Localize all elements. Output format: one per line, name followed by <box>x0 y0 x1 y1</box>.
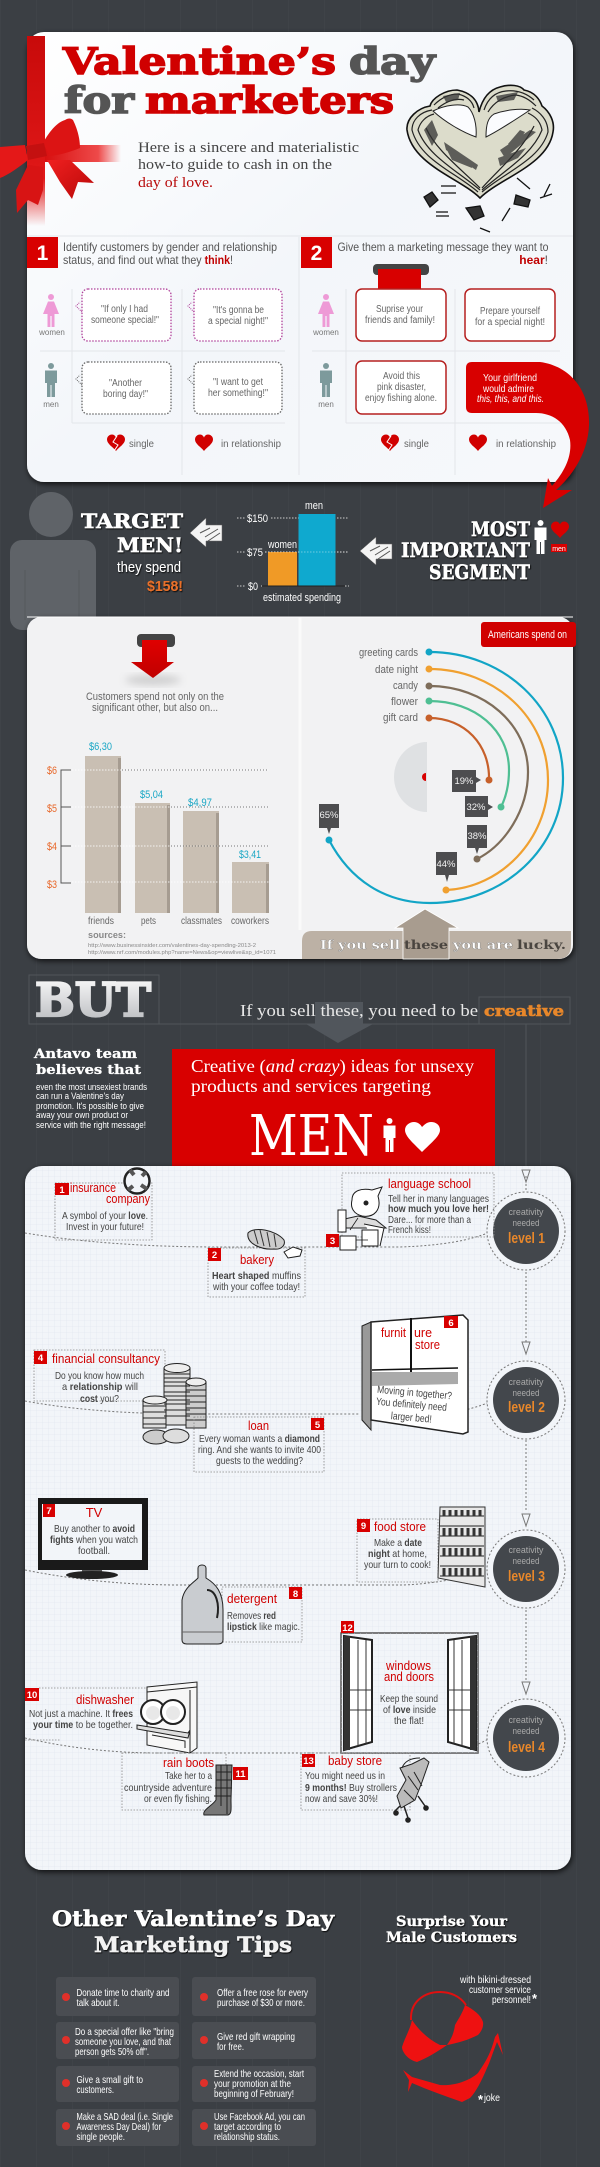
most important segment text <box>401 517 530 584</box>
item 6: furniture store: furnit <box>381 1325 406 1340</box>
item 4: financial consultancy: a relationship will <box>62 1381 138 1393</box>
intro text: Here is a sincere and materialistic <box>138 140 359 156</box>
item 12: windows and doors: Keep the sound <box>380 1693 438 1705</box>
panel: spending breakdown <box>27 617 576 959</box>
item 5: loan: ring. And she wants to invite 400 <box>198 1444 321 1456</box>
bikini caption: personnel! <box>492 1995 531 2006</box>
arc labels: date night <box>375 664 418 676</box>
icon: bread <box>248 1229 302 1258</box>
item 3: language school: language school <box>388 1176 471 1191</box>
step 2 heading: hear! <box>519 253 548 267</box>
step 1 heading: 1 <box>37 242 49 265</box>
red arrow down <box>125 634 181 685</box>
item 6: furniture store: store <box>415 1337 440 1352</box>
sources: sources: <box>88 930 126 940</box>
gender icons, step 1 <box>38 294 65 409</box>
level 3 badge <box>487 1530 565 1608</box>
level 4 badge: level 4 <box>508 1739 546 1756</box>
spending bar chart <box>47 741 269 927</box>
legend, step 1 <box>107 434 281 451</box>
curved red arrow with message: would admire <box>482 383 534 395</box>
item 3: language school <box>326 1173 494 1250</box>
step 1 heading <box>27 237 277 268</box>
antavo note: believes that <box>36 1063 141 1078</box>
icon: life ring <box>124 1168 150 1194</box>
item 6: furniture store: ure <box>414 1325 432 1340</box>
men heart icon <box>534 520 569 554</box>
item 10: dishwasher: your time to be together. <box>33 1719 133 1731</box>
item 1: insurance company <box>55 1168 152 1240</box>
sources: http://www.businessinsider.com/valentines-day-spending-2013-2 <box>88 943 256 949</box>
step 2 heading <box>301 237 549 268</box>
lucky strip and up arrow: lucky. <box>517 938 566 952</box>
arrow heads <box>522 1170 530 1694</box>
target men text: TARGET <box>81 509 183 533</box>
if you sell these text: If you sell these, you need to be <box>240 1001 478 1020</box>
item 12: windows and doors: the flat! <box>394 1715 424 1727</box>
percent tags: 65% <box>319 810 339 821</box>
item 11: rain boots: Take her to a <box>165 1770 212 1782</box>
most important segment text: IMPORTANT <box>401 538 530 562</box>
tips: right column: for free. <box>217 2041 244 2053</box>
antavo note <box>33 1047 147 1130</box>
item 12: windows and doors: 12 <box>342 1623 353 1634</box>
item 1: insurance company: company <box>106 1191 150 1206</box>
tips: left column: Make a SAD deal (i.e. Single <box>76 2111 173 2123</box>
speech bubbles, step 1: "I want to get <box>213 377 263 388</box>
lucky strip and up arrow: If you sell <box>320 938 401 952</box>
level 3 badge: creativity <box>508 1545 544 1556</box>
item 6: furniture store: 6 <box>448 1318 454 1329</box>
item 12: windows and doors: windows <box>385 1658 431 1673</box>
surprise heading: Male Customers <box>386 1930 517 1946</box>
spending bar chart: $4 <box>47 841 57 853</box>
spending note: Customers spend not only on the <box>86 691 224 703</box>
level 1 badge: creativity <box>508 1207 544 1218</box>
item 6: furniture store: You definitely need <box>376 1396 448 1414</box>
tips: right column: target according to <box>214 2121 281 2133</box>
curved red arrow with message <box>466 362 589 508</box>
sources: http://www.nrf.com/modules.php?name=News&op=viewlive&sp_id=1071 <box>88 950 276 956</box>
red banner: Creative (and crazy) ideas for unsexy <box>191 1056 474 1077</box>
americans spend on tag: Americans spend on <box>488 629 567 641</box>
item 13: baby store: 13 <box>303 1756 314 1767</box>
lucky strip and up arrow: you are <box>452 938 513 952</box>
bikini caption: with bikini-dressed <box>459 1975 531 1986</box>
item 13: baby store: 9 months! Buy strollers <box>305 1782 397 1794</box>
tips: left column: single people. <box>76 2131 125 2143</box>
item 10: dishwasher: 10 <box>27 1690 37 1701</box>
item 7: TV: fights when you watch <box>50 1534 138 1546</box>
surprise heading: Surprise Your <box>396 1914 508 1930</box>
spending bar chart: $0 <box>248 581 258 593</box>
item 10: dishwasher: dishwasher <box>76 1692 135 1707</box>
spending bar chart: $3,41 <box>239 849 261 861</box>
spending bar chart: $3 <box>47 879 57 891</box>
icon: stroller <box>393 1758 429 1823</box>
step 2 heading: 2 <box>311 242 322 265</box>
item 4: financial consultancy <box>34 1350 206 1444</box>
item 9: food store: your turn to cook! <box>364 1559 431 1571</box>
item 8: detergent: Removes red <box>227 1610 276 1622</box>
spending bar chart: $4,97 <box>188 797 212 809</box>
other tips heading: Other Valentine’s Day <box>52 1906 335 1931</box>
item 11: rain boots: 11 <box>235 1769 246 1780</box>
item 1: insurance company: 1 <box>59 1185 65 1196</box>
gender icons, step 1: women <box>38 328 65 337</box>
item 4: financial consultancy: financial consultancy <box>52 1351 160 1366</box>
item 11: rain boots: rain boots <box>163 1755 214 1770</box>
item 3: language school: 3 <box>330 1236 335 1247</box>
tips: left column: Awareness Day Deal) for <box>76 2121 161 2133</box>
title: day <box>349 41 436 83</box>
item 8: detergent <box>182 1565 302 1644</box>
legend, step 1: in relationship <box>221 438 281 450</box>
spending bar chart: coworkers <box>231 916 269 927</box>
speech bubbles, step 1: "It's gonna be <box>213 305 264 316</box>
speech bubbles, step 1: "If only I had <box>101 304 148 315</box>
money heart illustration <box>407 85 553 232</box>
item 7: TV: Buy another to avoid <box>54 1523 135 1535</box>
speech bubbles, step 1: her something!" <box>208 388 268 399</box>
icon: store shelf <box>438 1507 485 1587</box>
item 6: furniture store: larger bed! <box>390 1410 432 1426</box>
level 2 badge: needed <box>512 1388 540 1399</box>
target men text: $158! <box>147 578 183 595</box>
if you sell these text: creative <box>484 1002 564 1020</box>
level 4 badge: needed <box>512 1726 540 1737</box>
level 2 badge: level 2 <box>508 1399 545 1416</box>
arc labels: flower <box>391 696 418 708</box>
spending bar chart: friends <box>88 916 114 927</box>
icon: bikini <box>402 1992 503 2102</box>
legend, step 1: single <box>129 438 154 450</box>
arrow: from segment to chart <box>360 537 392 565</box>
item 9: food store: Make a date <box>374 1537 422 1549</box>
tips: right column: Give red gift wrapping <box>217 2031 295 2043</box>
spending bar chart: estimated spending <box>263 592 341 604</box>
item 7: TV: 7 <box>46 1506 52 1517</box>
item 7: TV: football. <box>78 1545 110 1557</box>
item 13: baby store: You might need us in <box>305 1770 385 1782</box>
other tips heading <box>52 1906 335 1957</box>
percent tags: 44% <box>436 859 456 870</box>
message boxes, step 2: Prepare yourself <box>480 306 540 317</box>
other tips heading: Marketing Tips <box>94 1932 292 1957</box>
message boxes, step 2: enjoy fishing alone. <box>365 393 437 404</box>
step 2 heading: Give them a marketing message they want to <box>338 240 549 254</box>
but heading: BUT <box>35 973 151 1027</box>
spending bar chart: women <box>267 539 297 551</box>
item 11: rain boots <box>122 1753 248 1815</box>
gift ribbon and bow <box>0 36 121 226</box>
item 8: detergent: lipstick like magic. <box>227 1621 300 1633</box>
panel: creative ideas <box>25 1166 571 1870</box>
spending bar chart: $150 <box>247 513 268 525</box>
bikini caption: * <box>532 1991 538 2006</box>
item 2: bakery: 2 <box>212 1250 217 1261</box>
spending bar chart: $6,30 <box>89 741 112 753</box>
item 6: furniture store <box>362 1315 468 1434</box>
antavo note: away your own product or <box>36 1110 128 1120</box>
lucky strip and up arrow: these <box>404 938 448 952</box>
antavo note: can run a Valentine's day <box>36 1091 124 1101</box>
message boxes, step 2: friends and family! <box>365 315 435 326</box>
item 13: baby store <box>301 1753 429 1823</box>
item 3: language school: how much you love her! <box>388 1203 489 1215</box>
legend, step 2 <box>381 434 556 451</box>
arc chart <box>326 648 563 903</box>
speech bubbles, step 1: boring day!" <box>103 389 148 400</box>
spending bar chart: men <box>305 500 323 512</box>
percent tags: 19% <box>454 776 474 787</box>
level 4 badge: creativity <box>508 1715 544 1726</box>
level 1 badge: needed <box>512 1218 540 1229</box>
tips: right column: beginning of February! <box>214 2088 294 2100</box>
level 3 badge: needed <box>512 1556 540 1567</box>
red banner: products and services targeting <box>191 1076 431 1096</box>
surprise heading <box>386 1914 517 1946</box>
item 3: language school: Tell her in many languages <box>388 1193 489 1205</box>
item 8: detergent: detergent <box>227 1591 277 1606</box>
if you sell these text <box>240 1001 564 1020</box>
title: Valentine’s <box>62 41 336 83</box>
icon: rain boot <box>204 1765 232 1815</box>
spending bar chart: classmates <box>181 916 222 927</box>
target men text: they spend <box>117 559 181 576</box>
item 13: baby store: baby store <box>328 1753 382 1768</box>
spending note <box>86 691 224 714</box>
bikini caption: joke <box>483 2093 500 2104</box>
tips: left column: Donate time to charity and <box>76 1987 170 1999</box>
antavo note: service with the right message! <box>36 1120 146 1130</box>
spending bar chart <box>237 500 349 604</box>
central half disc <box>394 742 427 812</box>
red banner: MEN <box>249 1104 374 1169</box>
percent tags: 32% <box>466 802 486 813</box>
level 3 badge: level 3 <box>508 1568 545 1585</box>
step 1 heading: status, and find out what they think! <box>63 253 233 267</box>
target men text: MEN! <box>117 533 183 557</box>
tips: right column: Offer a free rose for every <box>217 1987 309 1999</box>
speech bubbles, step 1 <box>76 289 282 414</box>
step 1 heading: Identify customers by gender and relationship <box>63 240 277 254</box>
message boxes, step 2: for a special night! <box>475 317 545 328</box>
message boxes, step 2: pink disaster, <box>377 382 426 393</box>
item 5: loan: guests to the wedding? <box>216 1455 303 1467</box>
speech bubbles, step 1: "Another <box>109 378 143 389</box>
legend, step 2: in relationship <box>496 438 556 450</box>
title <box>62 41 436 122</box>
tips: left column: customers. <box>76 2084 114 2096</box>
item 9: food store: food store <box>374 1519 426 1534</box>
if you sell these arrow <box>306 1002 373 1043</box>
item 1: insurance company: A symbol of your love. <box>62 1210 148 1222</box>
item 12: windows and doors <box>341 1621 478 1753</box>
but heading outlines <box>29 975 570 1170</box>
tips: right column: Extend the occasion, start <box>214 2068 304 2080</box>
item 2: bakery <box>208 1229 305 1297</box>
tips: left column <box>56 1977 179 2146</box>
arrow: pointing to target men <box>190 518 222 547</box>
panel: identify customers and marketing messages <box>0 32 573 482</box>
arc labels: gift card <box>383 712 418 724</box>
dividers <box>27 236 573 475</box>
arc labels: candy <box>393 680 418 692</box>
tips: right column: relationship status. <box>214 2131 280 2143</box>
level connector lines <box>25 1176 526 1753</box>
icon: dishwasher <box>137 1682 197 1753</box>
item 13: baby store: now and save 30%! <box>305 1793 378 1805</box>
level 1 badge <box>487 1192 565 1270</box>
spending bar chart: $5 <box>47 803 57 815</box>
item 4: financial consultancy: 4 <box>38 1353 44 1364</box>
tips: right column: purchase of $30 or more. <box>217 1997 305 2009</box>
tips: right column <box>192 1977 316 2146</box>
icon: student at desk <box>338 1187 386 1250</box>
intro text: how-to guide to cash in on the <box>138 157 332 173</box>
item 12: windows and doors: and doors <box>384 1669 434 1684</box>
tips: left column: person gets 50% off". <box>75 2046 149 2058</box>
sources <box>88 930 276 956</box>
arc labels: greeting cards <box>359 647 418 659</box>
intro text: day of love. <box>138 175 213 191</box>
antavo note: Antavo team <box>33 1047 137 1062</box>
speech bubbles, step 1: a special night!" <box>208 316 268 327</box>
most important segment text: MOST <box>471 517 530 541</box>
silhouette of a man <box>10 492 96 630</box>
item 12: windows and doors: of love inside <box>383 1704 436 1716</box>
item 11: rain boots: or even fly fishing. <box>144 1793 212 1805</box>
level 2 badge <box>487 1361 565 1439</box>
item 7: TV: TV <box>86 1505 103 1520</box>
item 10: dishwasher <box>25 1682 197 1753</box>
item 7: TV <box>38 1498 148 1579</box>
spending bar chart: $6 <box>47 765 57 777</box>
icon: coin stacks <box>143 1364 206 1444</box>
item 9: food store: 9 <box>361 1521 366 1532</box>
red banner <box>172 1049 495 1169</box>
antavo note: promotion. It's possible to give <box>36 1101 144 1111</box>
bikini caption <box>459 1975 538 2107</box>
message boxes, step 2: Suprise your <box>376 304 424 315</box>
gender icons, step 1: men <box>43 400 59 409</box>
item 3: language school: French kiss! <box>388 1224 431 1236</box>
tips: left column: talk about it. <box>76 1997 120 2009</box>
americans spend on tag <box>481 622 576 647</box>
lucky strip and up arrow <box>302 909 571 959</box>
item 10: dishwasher: Not just a machine. It frees <box>29 1708 133 1720</box>
item 5: loan: 5 <box>315 1420 321 1431</box>
men heart icon: men <box>552 546 566 553</box>
curved red arrow with message: this, this, and this. <box>477 393 544 405</box>
antavo note: even the most unsexiest brands <box>36 1082 147 1092</box>
gender icons, step 2: men <box>318 400 334 409</box>
percent tags <box>319 770 493 882</box>
spending note: significant other, but also on... <box>92 702 218 714</box>
legend, step 2: single <box>404 438 429 450</box>
tips: left column: Do a special offer like "bring <box>75 2026 174 2038</box>
tips: right column: Use Facebook Ad, you can <box>214 2111 305 2123</box>
level 1 badge: level 1 <box>508 1230 545 1247</box>
tips: right column: your promotion at the <box>214 2078 291 2090</box>
title: marketers <box>145 80 394 122</box>
spending bar chart: $5,04 <box>140 789 163 801</box>
level 2 badge: creativity <box>508 1377 544 1388</box>
curved red arrow with message: Your girlfriend <box>483 372 537 384</box>
message boxes, step 2 <box>356 289 555 414</box>
spending bar chart: pets <box>141 916 156 927</box>
title: for <box>64 80 135 122</box>
message boxes, step 2: Avoid this <box>383 371 420 382</box>
arc labels <box>359 647 418 724</box>
tips: left column: someone you love, and that <box>75 2036 171 2048</box>
item 8: detergent: 8 <box>293 1589 298 1600</box>
item 2: bakery: Heart shaped muffins <box>212 1270 301 1282</box>
item 5: loan: Every woman wants a diamond <box>199 1433 320 1445</box>
item 4: financial consultancy: Do you know how much <box>55 1370 144 1382</box>
item 5: loan <box>194 1417 324 1472</box>
ribbon clip above message box <box>373 264 429 290</box>
intro text <box>138 140 359 191</box>
item 2: bakery: bakery <box>240 1252 274 1267</box>
bikini caption: customer service <box>469 1985 531 1996</box>
bikini caption: * <box>478 2092 484 2107</box>
tips: left column: Give a small gift to <box>76 2074 143 2086</box>
most important segment text: SEGMENT <box>429 560 530 584</box>
target men text <box>81 509 183 595</box>
item 1: insurance company: Invest in your future! <box>66 1221 144 1233</box>
gender icons, step 2: women <box>312 328 339 337</box>
item 3: language school: Dare... for more than a <box>388 1214 471 1226</box>
item 6: furniture store: Moving in together? <box>377 1384 453 1402</box>
percent tags: 38% <box>467 831 487 842</box>
spending bar chart: $75 <box>247 547 263 559</box>
item 1: insurance company: insurance <box>70 1180 116 1195</box>
item 9: food store: night at home, <box>368 1548 427 1560</box>
item 5: loan: loan <box>248 1418 269 1433</box>
gender icons, step 2 <box>312 294 339 409</box>
speech bubbles, step 1: someone special!" <box>91 315 159 326</box>
item 4: financial consultancy: cost you? <box>80 1393 119 1405</box>
item 11: rain boots: countryside adventure <box>124 1782 212 1794</box>
item 9: food store <box>357 1507 485 1587</box>
item 2: bakery: with your coffee today! <box>212 1281 300 1293</box>
level 4 badge <box>487 1699 565 1777</box>
